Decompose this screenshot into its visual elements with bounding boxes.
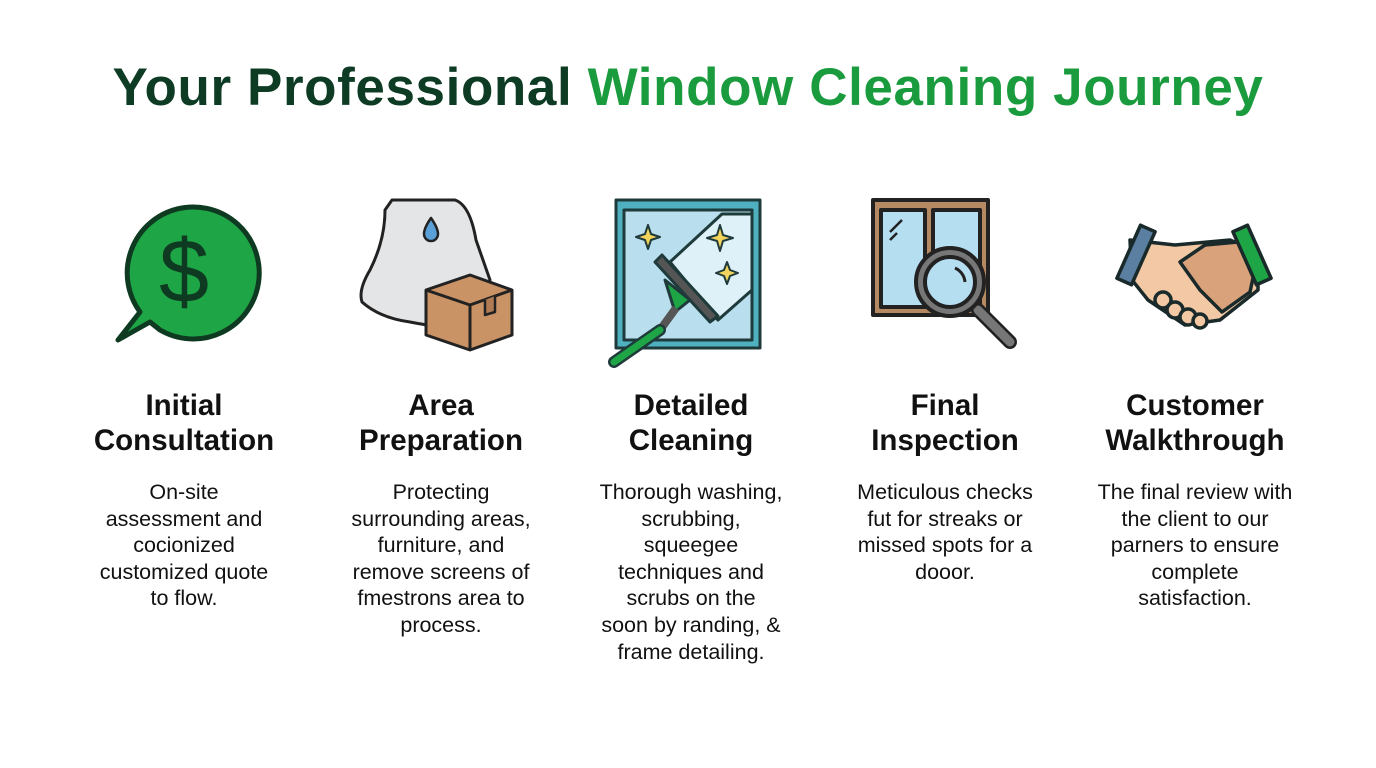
step 3: scrubs on the: [626, 586, 756, 610]
step 4: missed spots for a: [858, 533, 1032, 557]
step 1: customized quote: [100, 560, 268, 584]
step 3: squeegee: [644, 533, 738, 557]
step 4: Meticulous checks: [857, 480, 1033, 504]
step 3: [600, 389, 782, 664]
icon: window with magnifier: [873, 200, 1010, 342]
step 3: soon by randing, &: [601, 613, 781, 637]
step 5: parners to ensure: [1111, 533, 1279, 557]
step 2: process.: [400, 613, 482, 637]
icon: handshake: [1117, 225, 1271, 328]
step 1: assessment and: [106, 507, 262, 531]
step 2: remove screens of: [353, 560, 529, 584]
step 2: [351, 389, 531, 637]
icon: dollar speech bubble: [118, 207, 259, 340]
step 3: scrubbing,: [641, 507, 741, 531]
step 2: Area: [408, 389, 474, 422]
step 1: On-site: [149, 480, 219, 504]
icon: sheet and box: [361, 200, 512, 350]
icon: window with squeegee: [614, 200, 760, 362]
step 1: [94, 389, 274, 610]
step 1: Consultation: [94, 424, 274, 457]
step 3: Thorough washing,: [600, 480, 782, 504]
step 4: Inspection: [871, 424, 1019, 457]
step 4: fut for streaks or: [867, 507, 1023, 531]
step 5: Customer: [1126, 389, 1264, 422]
step 4: [857, 389, 1033, 584]
step 2: Protecting: [393, 480, 489, 504]
title: Your Professional Window Cleaning Journey: [112, 58, 1264, 117]
step 3: Cleaning: [629, 424, 753, 457]
step 5: Walkthrough: [1105, 424, 1285, 457]
step 2: furniture, and: [378, 533, 504, 557]
step 5: the client to our: [1121, 507, 1268, 531]
step 5: complete: [1151, 560, 1239, 584]
icon: dollar speech bubble: $: [159, 222, 209, 322]
step 3: techniques and: [618, 560, 764, 584]
step 4: Final: [911, 389, 979, 422]
step 2: surrounding areas,: [351, 507, 531, 531]
step 5: The final review with: [1098, 480, 1292, 504]
step 4: dooor.: [915, 560, 975, 584]
step 2: Preparation: [359, 424, 523, 457]
step 2: fmestrons area to: [357, 586, 525, 610]
step 1: cocionized: [133, 533, 235, 557]
step 1: Initial: [145, 389, 223, 422]
step 1: to flow.: [151, 586, 217, 610]
step 3: Detailed: [634, 389, 748, 422]
step 3: frame detailing.: [618, 640, 764, 664]
step 5: satisfaction.: [1138, 586, 1252, 610]
step 5: [1098, 389, 1292, 610]
